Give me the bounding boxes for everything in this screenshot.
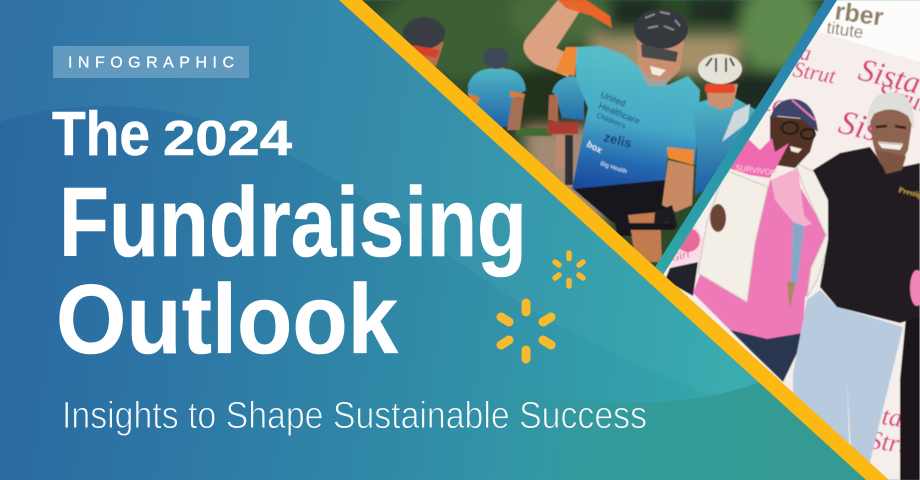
lead cyclist: orange ribbon [558, 0, 612, 28]
icon: small yellow spark [555, 253, 583, 286]
woman: smile [790, 146, 802, 153]
lead cyclist: orange sleeves [555, 47, 694, 165]
photo: cyclists riding in blue jerseys [362, 0, 825, 268]
pink Sista Strut logos: ta [792, 38, 813, 66]
man: neck [876, 150, 906, 174]
title: Fundraising [59, 167, 527, 277]
woman: pink shirt [693, 180, 827, 339]
lead cyclist: jersey sponsor text: Children's [595, 112, 627, 131]
woman: navy pants [730, 330, 803, 382]
Girl badge: Girl [670, 248, 691, 264]
woman: hand on man's arm [710, 204, 726, 232]
photo: couple at Sista Strut backdrop [640, 0, 920, 480]
banner strip [810, 0, 920, 62]
separator: blue teal stripe between photos [655, 0, 837, 270]
lead cyclist: jersey sponsor text [596, 91, 640, 148]
backdrop wall [640, 0, 920, 480]
lead cyclist: jersey sponsor text: Healthcare [597, 101, 641, 126]
man: white hair [867, 92, 914, 130]
pink Sista Strut logos: Strut [867, 425, 920, 461]
title [52, 100, 527, 374]
label: infographic tag: INFOGRAPHIC [68, 54, 234, 72]
lead cyclist: right arm [662, 160, 694, 212]
lead cyclist: jersey sponsor text: United [599, 90, 627, 109]
rider: far left cyclist [403, 17, 445, 66]
lead cyclist: white sponsor marks [585, 139, 628, 175]
banner text [826, 2, 884, 38]
lead cyclist: smile [650, 66, 666, 76]
lead cyclist: glove and handlebar [612, 205, 678, 236]
man: black polo shirt [813, 147, 920, 323]
lead cyclist: leg [628, 212, 662, 262]
pink Sista Strut logos: Sista [835, 104, 908, 156]
separator: yellow diagonal band [339, 0, 889, 480]
pink flower at edge [910, 270, 920, 306]
icon: large yellow spark [501, 303, 551, 359]
man: jeans [793, 290, 903, 470]
man: head and face [870, 109, 912, 166]
woman: hat [770, 99, 818, 132]
woman: scarf and lanyard [771, 168, 812, 310]
third person: dark clothing [900, 310, 920, 480]
label: infographic tag [53, 46, 249, 78]
rider: woman cyclist with white helmet [692, 54, 756, 195]
title: Outlook [56, 264, 398, 374]
woman: hat ribbon [792, 100, 815, 120]
woman: dark elbow [665, 262, 698, 296]
lead cyclist: shorts [573, 180, 666, 224]
man: moustache and smile [878, 142, 903, 150]
woman: white jacket [698, 163, 830, 302]
man: eyes and brows [876, 126, 906, 128]
lead cyclist: raised arm [523, 0, 582, 77]
title: 2024 [163, 112, 292, 166]
rider: background cyclist behind leader [548, 76, 584, 185]
woman: face [770, 116, 815, 168]
rider: lead cyclist waving [523, 0, 700, 262]
woman: glasses [782, 122, 815, 139]
woman: pink crown [728, 136, 789, 178]
pink Sista Strut logos: Strut [791, 56, 838, 89]
lead cyclist: jersey sponsor text: zelis [602, 129, 633, 151]
banner text: titute [825, 18, 865, 42]
lead cyclist: white sponsor marks: Big Health [599, 161, 628, 175]
lead cyclist: face and beard [637, 40, 684, 86]
pink Sista Strut logos: ta [763, 87, 788, 119]
woman: pink crown: SURVIVOR [735, 163, 777, 178]
pink Sista Strut logos [763, 38, 920, 461]
photo background: trees and road [362, 0, 825, 268]
subtitle: Insights to Shape Sustainable Success [62, 395, 647, 437]
rider: center background cyclist [468, 47, 526, 130]
lead cyclist: jersey [572, 46, 700, 189]
lead cyclist: helmet [634, 9, 688, 49]
pink Sista Strut logos: ta [880, 401, 904, 433]
lead cyclist: glasses [641, 44, 678, 62]
Girl badge [670, 225, 704, 268]
lead cyclist: white sponsor marks: box [585, 139, 604, 155]
title: The [52, 100, 150, 169]
